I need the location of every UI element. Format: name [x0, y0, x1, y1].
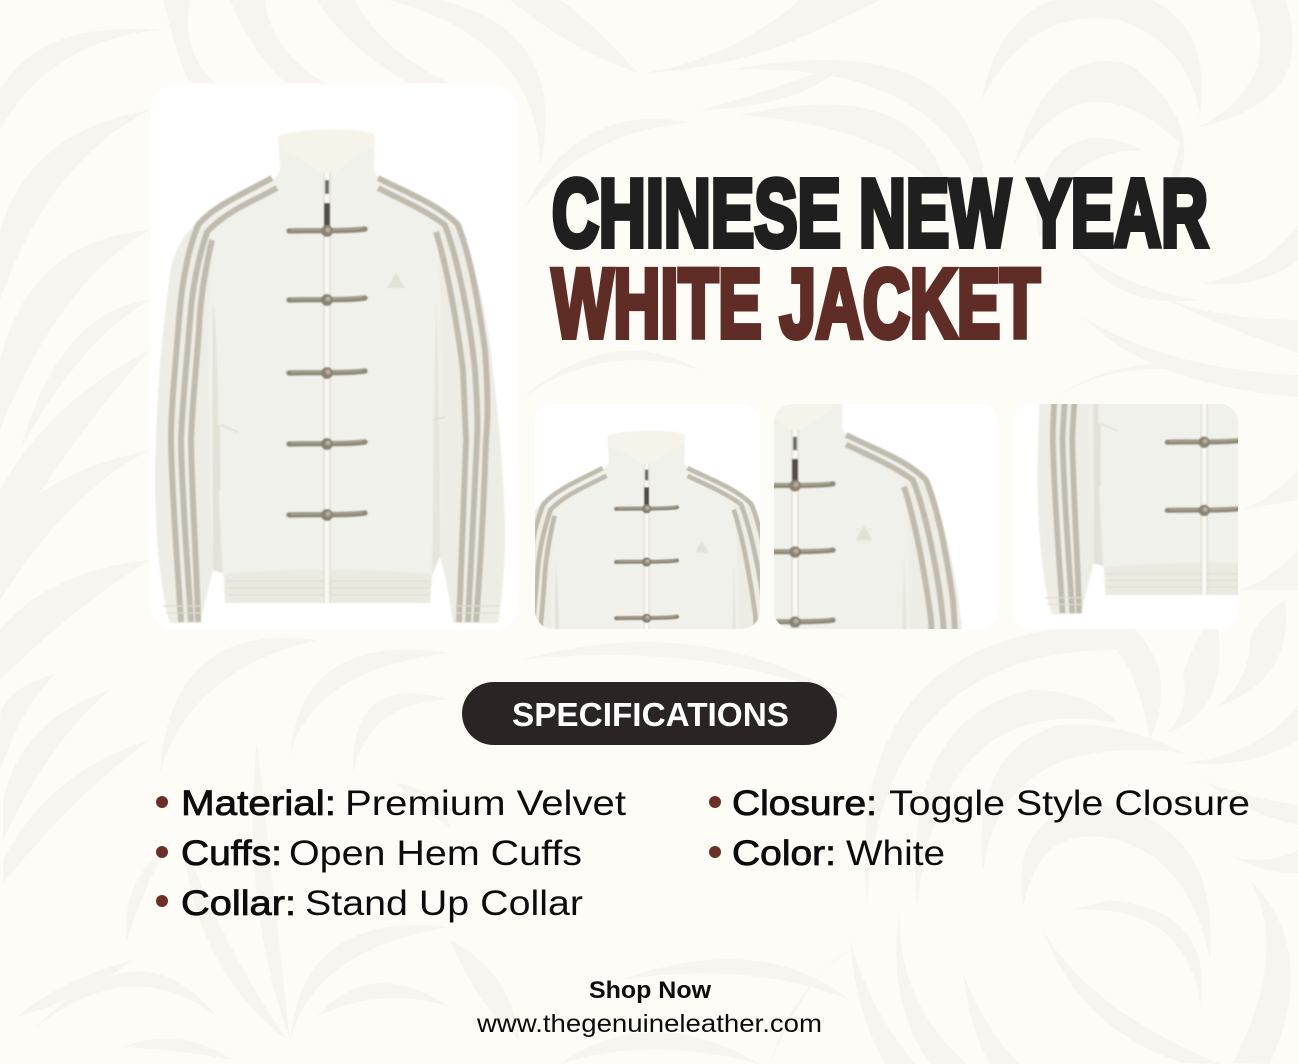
specifications badge: SPECIFICATIONS: [512, 696, 789, 733]
spec: material: Premium Velvet: [345, 784, 626, 823]
spec: collar: [156, 884, 583, 923]
title: [552, 160, 1208, 358]
spec: closure: [709, 784, 1250, 823]
website url: www.thegenuineleather.com: [476, 1010, 822, 1038]
spec: collar: Collar:: [181, 884, 296, 923]
specification list: left column: [156, 784, 626, 923]
specification list: right column: [709, 784, 1250, 873]
shop now label: Shop Now: [589, 977, 711, 1004]
spec: material: [156, 784, 626, 823]
jacket front view: [155, 129, 505, 623]
panel: main product photo: [155, 130, 505, 623]
spec: color: White: [846, 834, 945, 873]
panel: thumbnail collar view: [535, 431, 760, 629]
title line 2: WHITE JACKET: [552, 249, 1040, 358]
spec: material: Material:: [181, 784, 336, 823]
spec: cuffs: Cuffs:: [181, 834, 282, 873]
specifications badge: [462, 682, 837, 745]
spec: closure: Closure:: [732, 784, 877, 823]
spec: closure: Toggle Style Closure: [889, 784, 1250, 823]
panel: thumbnail hem view: [1038, 404, 1238, 629]
panel: thumbnail shoulder view: [774, 404, 962, 629]
spec: cuffs: [156, 834, 582, 873]
spec: color: Color:: [732, 834, 836, 873]
spec: cuffs: Open Hem Cuffs: [289, 834, 582, 873]
spec: color: [709, 834, 945, 873]
spec: collar: Stand Up Collar: [305, 884, 583, 923]
